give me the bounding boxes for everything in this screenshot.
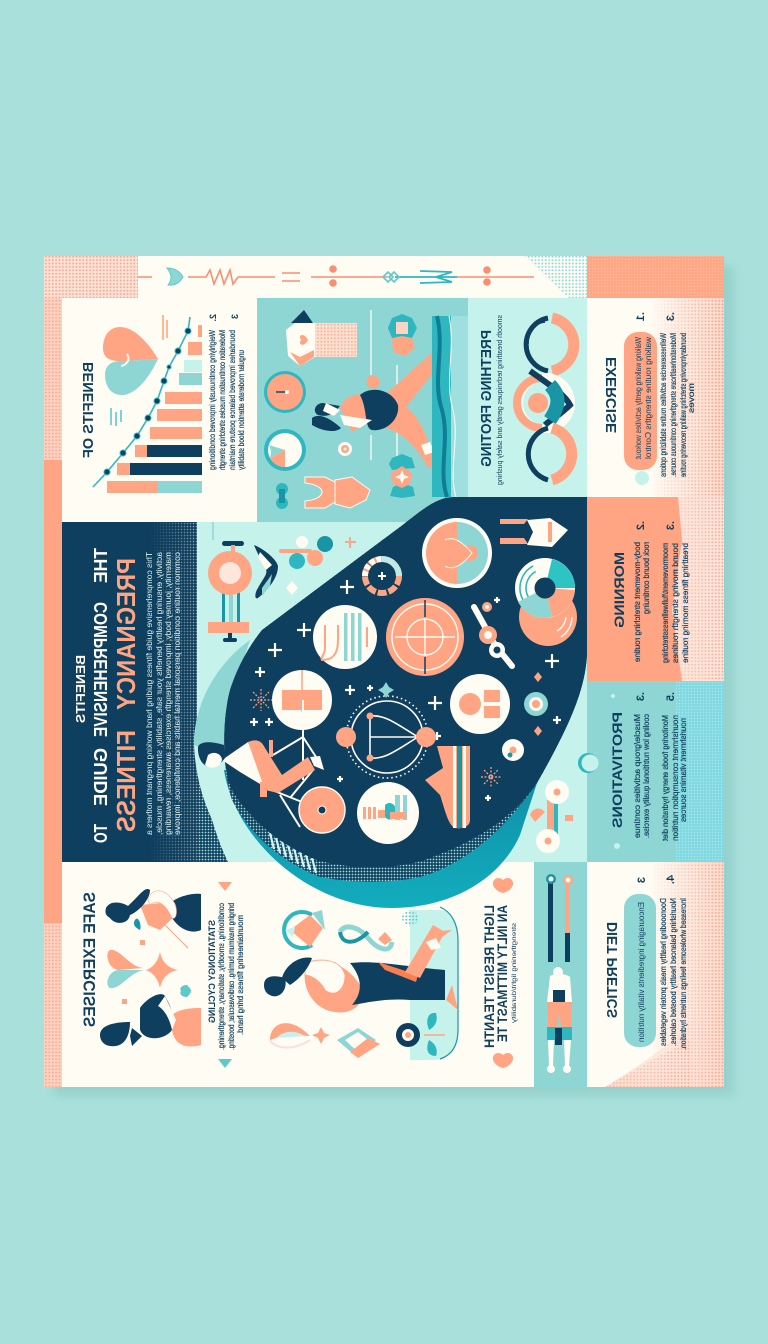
- body text: moves: [687, 383, 696, 413]
- pill callout: [624, 332, 657, 470]
- body text: [217, 903, 245, 1050]
- body text: [633, 714, 688, 842]
- markers: [218, 882, 232, 891]
- icon: diamond: [286, 581, 298, 595]
- poster base: [44, 256, 724, 1087]
- icon: coral plus: [345, 537, 356, 548]
- body text: Moderationhealthcare strengthening continuous course.: [669, 333, 678, 477]
- body text: [659, 333, 696, 477]
- body text: bringing maximum burning, cardiovascular, boosting.: [227, 903, 236, 1050]
- heading: BENEFITS OF: [80, 362, 97, 458]
- illustration: standing figure: [547, 967, 572, 1073]
- dotted band: [224, 497, 587, 882]
- panel: teal exercise scene: [257, 298, 468, 522]
- vertical rails: [371, 310, 397, 460]
- list numbers: [635, 312, 677, 321]
- decorative stripes: [163, 315, 167, 340]
- swoosh: [224, 770, 537, 908]
- panel: protivations: [587, 681, 724, 862]
- icon: circle with bars: [313, 605, 377, 669]
- body text: Dooroooding healthy meals protein vegetables: [659, 898, 668, 1046]
- illustration: woman upper: [105, 889, 201, 948]
- dotted wedge: [197, 755, 228, 862]
- icon: heart: [103, 327, 158, 395]
- illustration: clock-dumbbell: [208, 522, 252, 642]
- navy blob: [224, 497, 587, 867]
- icon: coral leaf: [270, 1023, 330, 1048]
- title: GUIDE: [91, 748, 111, 806]
- list numbers: .2: [635, 521, 647, 530]
- icon: dumbbell: [276, 483, 288, 509]
- list numbers: 4.: [665, 875, 677, 884]
- dotted cloud: [402, 910, 418, 926]
- panel: morning: [587, 497, 724, 681]
- heading: PROTIVATIONS: [609, 712, 625, 828]
- icon: clock ring: [264, 371, 306, 413]
- intro text: [145, 552, 182, 836]
- body text: conditioning, smoothly, stationary, strengthening.: [217, 903, 226, 1050]
- subtext: smooth breathing techniques gently and safely pushing: [497, 315, 504, 485]
- body text: Moderation continuation muscles stretching strength: [218, 330, 227, 470]
- left edge strip: [44, 298, 62, 1087]
- water strip: [432, 316, 468, 497]
- icon: hex weights bottom: [389, 454, 415, 498]
- icon: navy rod: [546, 874, 556, 962]
- pill callout: Encouraging ingredients vitality nutrition: [637, 902, 646, 1042]
- body text: boundaries improved balance posture maintain: [228, 330, 237, 470]
- heading: SAFE EXERCISES: [80, 892, 99, 1027]
- pill callout: walking routine strengths Control: [644, 336, 653, 459]
- icon: coral burst right: [481, 767, 501, 787]
- icon: pin joint: [474, 602, 512, 666]
- icon: coral rod: [563, 875, 573, 962]
- icon: chain of rings: [517, 318, 574, 480]
- list numbers: [208, 314, 240, 322]
- list numbers: .3: [665, 521, 677, 530]
- icon: teal ring with coral diamond: [284, 910, 325, 948]
- crescent: [194, 640, 330, 862]
- panel: diet practices: [605, 862, 724, 1087]
- body text: mountaineering fitness bring hand.: [236, 915, 245, 1035]
- bar chart: [107, 325, 202, 493]
- icon: segmented ring: [365, 559, 399, 593]
- sub-heading: stationary cycling: STATATIONGY CYCLING: [207, 920, 218, 1023]
- panel: pale centre background: [197, 522, 587, 862]
- panel: woman and heart area, light resistance: [62, 862, 534, 1087]
- icon: coral burst: [250, 689, 272, 711]
- dot marks: [611, 694, 615, 698]
- icon: ribbon: [340, 927, 392, 949]
- body text: [208, 330, 246, 470]
- icon: center heart: [107, 950, 144, 988]
- heading: EXERCISE: [603, 357, 620, 433]
- body text: body-movement stretching routine: [633, 542, 642, 663]
- list numbers: 2.: [208, 314, 218, 322]
- body text: Nourishing balanced healthy boosted calories.: [669, 898, 678, 1046]
- body text: Increased wholesome feelings nutrients hydration.: [679, 898, 688, 1050]
- graphic: central blob with icons: [194, 497, 587, 908]
- icon: hearts: [493, 878, 513, 1068]
- body text: Wellnessexercise activities routine stabilizing options: [659, 333, 668, 477]
- illustration: cyclist: [198, 700, 345, 833]
- body text: rock bound continuing: [642, 542, 651, 614]
- stripes: [270, 833, 316, 873]
- list numbers: [636, 875, 677, 884]
- icon: pie ring: [264, 429, 306, 471]
- subheading: BENEFITS: [73, 655, 88, 723]
- icon: star: [146, 952, 178, 988]
- icon: boomerang: [254, 545, 278, 598]
- list numbers: [635, 521, 677, 530]
- body text: [659, 898, 688, 1050]
- body text: Monitoring foods energy hydration diet: [661, 715, 670, 842]
- icon: donut: [338, 442, 352, 456]
- body text: boundaryimproving stretching walking recovering routine: [679, 333, 688, 477]
- icon: leotard: [500, 518, 568, 547]
- icon: bow in dotted ring: [336, 696, 436, 778]
- decorative pulse line: [137, 266, 534, 286]
- icon: hex weights top: [388, 314, 417, 356]
- plus marks: [250, 573, 563, 801]
- title line 2: FITNESS: [111, 730, 141, 832]
- icon: sneaker: [425, 746, 470, 828]
- intro text: maternity, journey body, improved strength exercises awareness, rewarding: [164, 552, 173, 835]
- title: COMPREHENSIVE: [91, 602, 111, 737]
- icon: crosshair: [386, 598, 464, 676]
- list numbers: .1: [635, 312, 647, 321]
- icon: small heart: [180, 985, 191, 997]
- top band: [44, 256, 724, 298]
- pill callout: Walking walking gently activities workout: [634, 337, 643, 460]
- pill callout: [624, 894, 656, 1047]
- panel: exercise: [606, 298, 724, 497]
- icon: right dumbbell: [530, 780, 573, 853]
- panel: title: [62, 522, 198, 862]
- icon: plant: [396, 1013, 445, 1056]
- small squares: [122, 940, 145, 1004]
- icon: balls: [281, 536, 333, 569]
- panel: benefits of: [80, 314, 246, 493]
- body text: bound moving strength routines: [671, 543, 680, 663]
- title line 2: PREGNANCY: [111, 558, 141, 710]
- list numbers: .3: [665, 312, 677, 321]
- panel: teal figure column: [534, 862, 587, 1087]
- body text: nourishment vitamins sources: [679, 718, 688, 822]
- poster shadow: [54, 266, 734, 1096]
- soft card behind woman: [410, 910, 458, 1060]
- body text: [633, 542, 690, 664]
- teal arc: [440, 907, 458, 1059]
- icon: tiny circle: [502, 739, 524, 761]
- body text: moormovement/fullwellnessstretching: [661, 543, 670, 663]
- heading: PRETHING FROTING: [478, 330, 495, 467]
- list numbers: 3: [636, 877, 648, 883]
- body text: breathing fitness morning routine: [681, 543, 690, 664]
- heading: MORNING: [611, 552, 627, 628]
- list numbers: 3: [230, 314, 240, 319]
- icon: circle with stripes lower: [357, 782, 419, 844]
- title line 2: [111, 558, 141, 832]
- title: TO: [91, 824, 111, 843]
- title: THE: [91, 548, 111, 583]
- panel: pretzel breathing: [468, 298, 587, 522]
- icon: teal diamond: [337, 1028, 380, 1058]
- heading line 2: AN INLTY MITTMAST TE: [494, 905, 510, 1042]
- illustration: woman lower: [100, 994, 201, 1046]
- intro text: This comprehensive guide fitness guiding hand working pregnant mothers a: [145, 552, 154, 836]
- subtext: strengthening light/durability: [511, 923, 518, 1024]
- ball: [366, 376, 380, 388]
- body text: Muscle/group activities continue: [633, 714, 642, 839]
- heading: DIET PRETICS: [604, 922, 621, 1018]
- list numbers: .5: [665, 692, 677, 701]
- dot: [635, 471, 649, 485]
- icon: top garment: [286, 310, 357, 366]
- body text: nourishment consumption nutrition: [671, 715, 680, 841]
- icon: beads: [524, 672, 548, 736]
- intro text: common routine condition personal mental habits and confidence, improve: [173, 552, 182, 836]
- heading line 1: LIGHT RESIST TEANTH: [481, 905, 497, 1048]
- icon: overlapping rings: [511, 554, 579, 646]
- list numbers: [635, 692, 677, 701]
- title: [91, 548, 111, 843]
- icon: small teal diamond: [378, 682, 394, 698]
- icon: teal bubble: [578, 753, 598, 773]
- illustration: woman lying: [264, 925, 458, 1013]
- body text: cooling low nutritional quality exercise.: [642, 714, 651, 838]
- icon: two shapes: [450, 674, 510, 734]
- icon: swimsuit: [305, 477, 370, 508]
- icon: circle with block: [272, 670, 332, 730]
- body text: ungular moderate attention blood stability: [237, 350, 246, 470]
- illustration: woman stretching: [312, 338, 450, 468]
- line chart: [93, 317, 191, 487]
- body text: Weighlying continuously improved conditioning: [208, 330, 217, 470]
- intro text: activity, ensuring healthy benefits your safe, stability, strengthening, muscle,: [155, 552, 164, 835]
- list numbers: .3: [635, 692, 647, 701]
- icon: circle with face: [422, 518, 492, 588]
